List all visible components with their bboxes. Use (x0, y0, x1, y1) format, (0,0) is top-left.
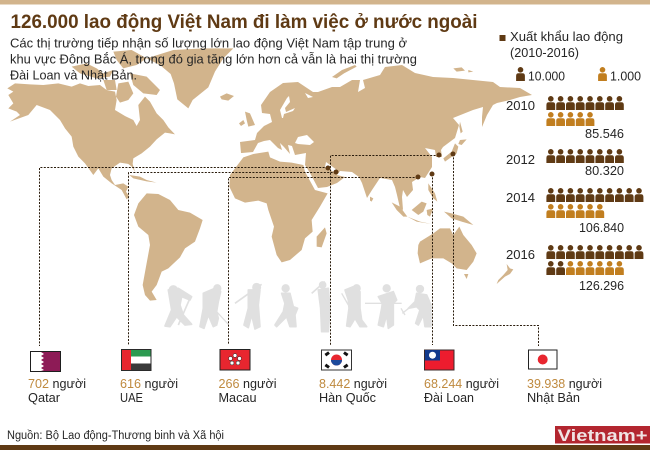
country: Macau: 266 người (218, 376, 277, 391)
Eurasia (240, 65, 532, 210)
line: Japan (454, 154, 538, 346)
legend (500, 29, 641, 84)
legend: 1.000: 1.000 (610, 68, 641, 84)
flag: Taiwan (424, 350, 454, 370)
Africa (229, 152, 328, 262)
country: Taiwan (424, 350, 499, 405)
pictogram: 2014: 106.840 (579, 220, 624, 235)
pictogram: 2012 (506, 149, 624, 178)
logo: Vietnam+: Vietnam+ (558, 427, 648, 445)
line: Qatar (40, 168, 328, 346)
bottom bar (0, 445, 650, 450)
pictogram: 2014 (506, 188, 643, 235)
inland seas (280, 93, 337, 172)
pictogram: 2010: 85.546 (585, 126, 624, 141)
connector lines (40, 154, 538, 346)
pictogram: 2016: 126.296 (579, 278, 624, 293)
country: South Korea: Hàn Quốc (319, 390, 376, 405)
North America (7, 50, 175, 199)
legend: 1.000 (598, 67, 641, 84)
flag: UAE (121, 350, 151, 370)
Arctic and Pacific islands (332, 65, 473, 162)
line: UAE (128, 172, 336, 345)
country: Taiwan: Đài Loan (424, 390, 474, 405)
country: South Korea (319, 350, 387, 405)
flag: South Korea (322, 350, 352, 370)
Iceland (220, 93, 234, 101)
legend heading (500, 29, 623, 60)
pictogram: 2010 (506, 96, 624, 141)
workers right group (342, 285, 431, 328)
country: Japan: Nhật Bản (527, 390, 580, 405)
Southeast Asia islands (370, 183, 473, 225)
South America (134, 193, 203, 301)
pictogram: 2016 (506, 245, 643, 293)
country: Macau (218, 350, 277, 405)
workers left group (165, 282, 330, 332)
country: Japan (527, 350, 602, 405)
title: 126.000 lao động Việt Nam đi làm việc ở nước ngoài (10, 12, 478, 33)
legend heading: Xuất khẩu lao động (510, 29, 623, 44)
world map (7, 48, 532, 301)
country: Taiwan: 68.244 người (424, 376, 499, 391)
country: South Korea: 8.442 người (319, 376, 387, 391)
worker silhouettes (165, 282, 431, 332)
intro text: Các thị trường tiếp nhận số lượng lớn lao động Việt Nam tập trung ở (10, 36, 407, 50)
Greenland (147, 48, 233, 108)
Australia (418, 227, 477, 279)
legend heading: (2010-2016) (510, 45, 579, 60)
Madagascar (317, 227, 327, 247)
location dots (326, 152, 456, 180)
line: Macau (228, 178, 418, 345)
intro text (10, 36, 417, 82)
intro text: khu vực Đông Bắc Á, trong đó gia tăng lớn hơn cả vẫn là hai thị trường (10, 52, 417, 66)
flag: Qatar (30, 352, 60, 372)
flag: Macau (220, 350, 250, 370)
country: Qatar: 702 người (28, 376, 86, 391)
country: Macau: Macau (218, 390, 256, 405)
line: South Korea (330, 156, 439, 345)
legend: 10.000 (516, 67, 565, 84)
pictogram: 2016: 2016 (506, 247, 535, 262)
legend: 10.000: 10.000 (528, 68, 565, 84)
country: UAE: 616 người (120, 376, 178, 391)
intro text: Đài Loan và Nhật Bản. (10, 68, 137, 82)
source note: Nguồn: Bộ Lao động-Thương binh và Xã hội (7, 430, 224, 442)
line: Taiwan (432, 174, 434, 345)
New Zealand (497, 264, 513, 284)
pictogram: 2010: 2010 (506, 98, 535, 113)
flag: Japan (528, 350, 557, 369)
pictogram: 2014: 2014 (506, 190, 535, 205)
pictogram: 2012: 80.320 (585, 163, 624, 178)
pictogram: 2012: 2012 (506, 152, 535, 167)
country: Qatar (28, 352, 86, 405)
country: UAE (120, 350, 178, 405)
top bar (0, 0, 650, 4)
country: UAE: UAE (120, 390, 143, 405)
country: Qatar: Qatar (28, 390, 61, 405)
country: Japan: 39.938 người (527, 376, 602, 391)
British Isles (239, 112, 255, 127)
